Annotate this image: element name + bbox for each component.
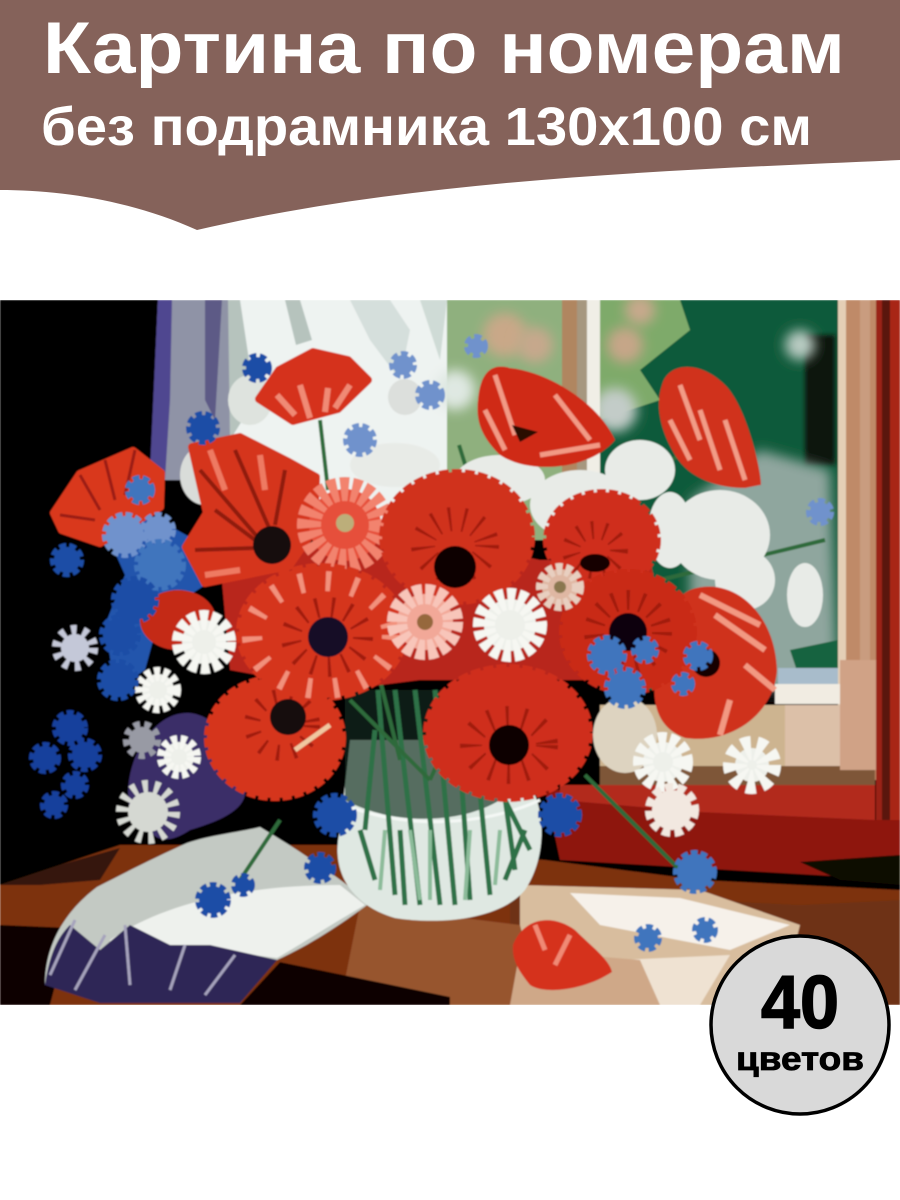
badge label: цветов [736,1040,864,1077]
title: Картина по номерам [43,8,845,89]
stems [240,420,825,880]
white daisies front [61,599,769,832]
window frame [562,300,900,820]
white cloth [45,827,370,1003]
painting [0,295,900,1005]
pink gerberas [397,569,578,650]
dark background [0,300,900,891]
poppy: right middle [562,572,694,692]
fallen poppy [513,920,612,990]
badge: 40 colours [711,936,889,1114]
blue cornflowers [33,338,830,948]
table [0,845,900,1005]
poppy: left large [186,437,316,583]
gerbera: red centre left [309,489,381,561]
poppy: left small [140,590,216,650]
badge number: 40 [761,960,839,1044]
bouquet underlay [220,530,670,690]
poppy: top right centre [477,367,615,467]
white daisies behind [180,375,823,773]
glass vase [337,690,542,921]
poppy: top right [659,367,761,488]
poppy: upper left [54,450,161,543]
window view [435,295,838,690]
poppy: far right [654,587,777,739]
poppy: centre large [239,566,405,698]
purple fabric [128,713,246,839]
curtain [150,300,460,520]
red sill [545,785,900,885]
poppy: top centre [259,352,368,421]
poppy: lower centre [426,667,590,799]
poppy: right [546,492,658,588]
poppy: lower left [207,678,343,798]
blue cluster underlay [105,515,205,690]
header banner [0,0,900,230]
poppy: centre [382,472,532,602]
subtitle: без подрамника 130х100 см [41,97,812,157]
